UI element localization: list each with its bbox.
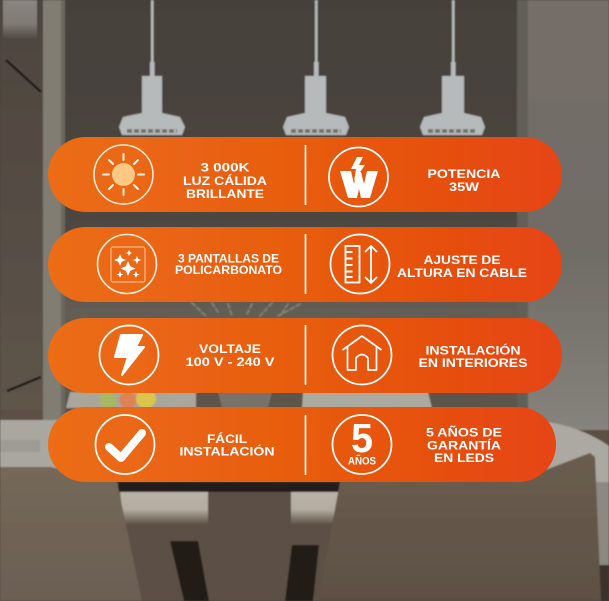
- text: 5 años de garantía en leds: 5 AÑOS DE: [426, 424, 502, 440]
- text: 3 000K luz cálida brillante: [183, 160, 267, 201]
- pendant lamps: [119, 0, 485, 135]
- icon: check mark: [96, 415, 154, 474]
- pill: row 3: [48, 318, 562, 393]
- text: 3 000K luz cálida brillante: 3 000K: [200, 160, 250, 174]
- panels: [48, 137, 562, 482]
- text: 3 pantallas de policarbonato: 3 PANTALLAS DE: [178, 254, 279, 266]
- text: instalación en interiores: INSTALACIÓN: [426, 342, 520, 358]
- text: 3 pantallas de policarbonato: POLICARBONATO: [175, 265, 282, 277]
- text: voltaje: [186, 342, 276, 369]
- white chair backs, fruit and vase: [66, 392, 196, 408]
- row 3: [48, 318, 562, 393]
- icon: watt bolt: [329, 148, 388, 206]
- text: 5 años de garantía en leds: [426, 424, 502, 465]
- pill: row 2: [48, 227, 562, 302]
- icon: 5 años: AÑOS: [348, 454, 376, 468]
- divider: [305, 415, 306, 475]
- text: ajuste de altura en cable: [397, 253, 527, 280]
- text: potencia 35W: 35W: [449, 180, 480, 194]
- text: voltaje: 100 V - 240 V: [186, 355, 276, 369]
- icon: 5 años: 5: [351, 415, 373, 461]
- chair back right: [318, 453, 601, 601]
- icon: height adjustment: [330, 234, 390, 294]
- text: 3 000K luz cálida brillante: BRILLANTE: [186, 187, 264, 201]
- divider: [305, 325, 306, 385]
- text: potencia 35W: POTENCIA: [428, 167, 501, 181]
- text: ajuste de altura en cable: AJUSTE DE: [424, 253, 500, 267]
- text: fácil instalación: FÁCIL: [207, 431, 248, 446]
- row 4: [48, 407, 556, 482]
- pill: row 4: [48, 407, 556, 482]
- text: 5 años de garantía en leds: GARANTÍA: [427, 438, 501, 452]
- icon: sun: [94, 145, 153, 204]
- row 1: [48, 137, 562, 212]
- chair seats and legs: [120, 492, 208, 524]
- icon: 5 años: [332, 415, 392, 474]
- text: 3 pantallas de policarbonato: [175, 254, 282, 277]
- icon: house: [332, 326, 392, 384]
- wall strip right of chair: [594, 482, 609, 565]
- row 2: [48, 227, 562, 302]
- icon: polycarbonate screen: [98, 234, 156, 294]
- text: fácil instalación: INSTALACIÓN: [180, 444, 274, 458]
- text: voltaje: VOLTAJE: [199, 342, 261, 356]
- text: 3 000K luz cálida brillante: LUZ CÁLIDA: [183, 173, 267, 188]
- text: ajuste de altura en cable: ALTURA EN CABLE: [397, 266, 527, 280]
- icon: lightning bolt: [100, 326, 158, 384]
- greenery behind panels: [192, 303, 300, 316]
- text: fácil instalación: [180, 431, 274, 458]
- text: 5 años de garantía en leds: EN LEDS: [434, 451, 494, 465]
- text: instalación en interiores: [418, 342, 528, 370]
- text: potencia 35W: [428, 167, 501, 194]
- divider: [305, 234, 306, 294]
- pill: row 1: [48, 137, 562, 212]
- text: instalación en interiores: EN INTERIORES: [418, 356, 528, 370]
- divider: [305, 145, 306, 205]
- table with marble top: [0, 420, 66, 482]
- chair back left: [0, 467, 142, 601]
